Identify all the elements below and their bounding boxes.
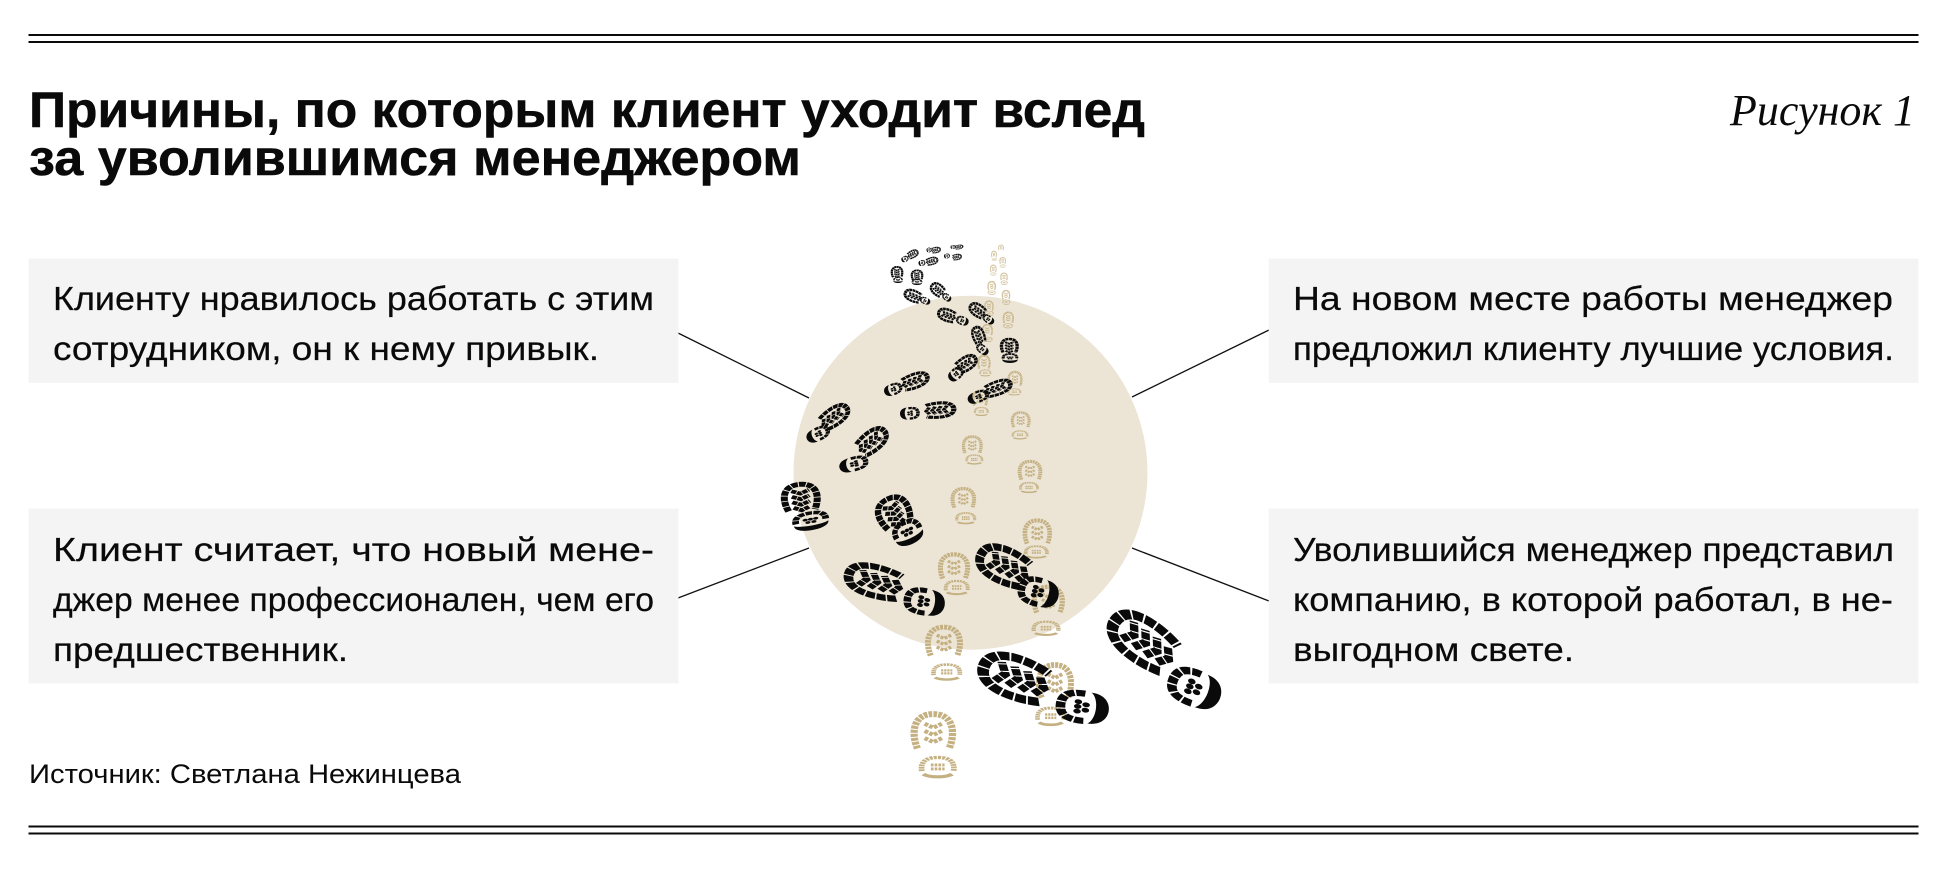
panel: upper right reason: предложил клиенту лучшие условия. xyxy=(1293,330,1894,367)
icon: tan footprint trail xyxy=(914,245,1071,777)
panel: upper left reason: Клиенту нравилось работать с этим xyxy=(53,280,654,317)
title: за уволившимся менеджером xyxy=(29,130,801,186)
panel: lower right reason: выгодном свете. xyxy=(1293,631,1574,668)
panel: upper right reason: На новом месте работы менеджер xyxy=(1293,280,1893,317)
panel: lower left reason: джер менее профессионален, чем его xyxy=(53,581,654,618)
icon: black footprint trail xyxy=(783,245,1227,726)
panel: upper left reason xyxy=(28,258,678,383)
bottom double rule xyxy=(28,826,1918,834)
panel: lower left reason xyxy=(28,508,678,684)
connector line: upper right xyxy=(1132,330,1269,397)
panel: lower right reason: Уволившийся менеджер представил xyxy=(1293,531,1894,568)
panel: lower left reason: Клиент считает, что новый мене- xyxy=(53,531,654,568)
panel: upper right reason xyxy=(1269,258,1918,383)
top double rule xyxy=(28,34,1918,43)
source note: Источник: Светлана Нежинцева xyxy=(29,759,462,789)
connector line: lower left xyxy=(678,548,809,598)
title: Причины, по которым клиент уходит вслед xyxy=(29,82,1145,138)
connector line: lower right xyxy=(1132,548,1269,601)
panel: lower left reason: предшественник. xyxy=(53,631,348,668)
title xyxy=(29,82,1145,186)
beige circle xyxy=(794,296,1148,650)
connector line: upper left xyxy=(678,333,809,398)
panel: upper left reason: сотрудником, он к нему привык. xyxy=(53,330,599,367)
panel: lower right reason: компанию, в которой работал, в не- xyxy=(1293,581,1893,618)
panel: lower right reason xyxy=(1269,508,1918,684)
figure label: Рисунок 1 xyxy=(1729,86,1915,135)
